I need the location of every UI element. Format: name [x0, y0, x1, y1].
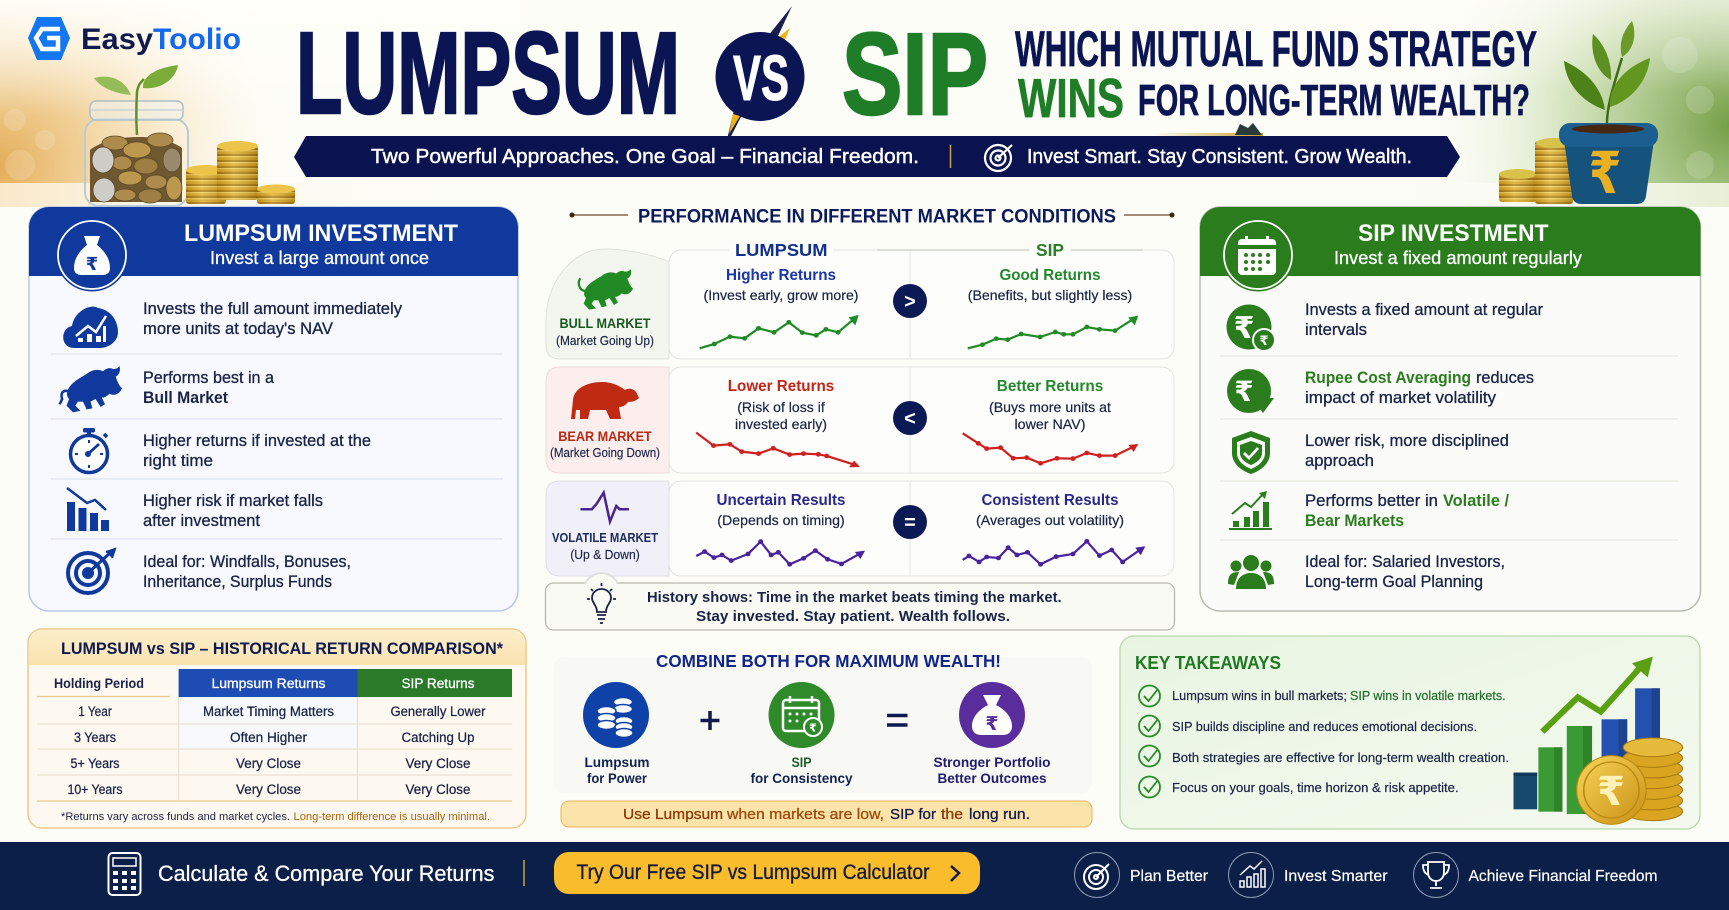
equals sign [887, 716, 908, 725]
table header cells: Lumpsum Returns [212, 676, 326, 691]
tagline right: Invest Smart. Stay Consistent. Grow Wealth. [1027, 146, 1412, 168]
callout: history shows [546, 573, 1174, 630]
table rows: Very Close [236, 756, 301, 771]
lumpsum bull result [704, 267, 858, 303]
table header cells [54, 669, 512, 697]
sip points text: impact of market volatility [1305, 389, 1497, 407]
takeaway text: Focus on your goals, time horizon & risk appetite. [1172, 780, 1459, 795]
icon: stopwatch [70, 428, 108, 472]
sip points text: Performs better in [1305, 492, 1438, 510]
icon: rupee coin [1226, 304, 1275, 351]
panel: combine both [554, 651, 1092, 793]
lumpsum points text: Performs best in a [143, 369, 275, 387]
comparison badge: greater than [893, 284, 927, 318]
logo [28, 17, 241, 60]
sip volatile result: (Averages out volatility) [976, 512, 1124, 528]
sip bear result: lower NAV) [1014, 416, 1086, 432]
bear market comparison card [669, 367, 1174, 473]
sip points text: Bear Markets [1305, 512, 1404, 530]
icon: rupee down arrow: ₹ [1234, 376, 1254, 407]
table rows [68, 704, 486, 797]
icon: rupee down arrow [1227, 369, 1274, 413]
headline question: WINS [1018, 67, 1124, 129]
big coin rupee: ₹ [1597, 770, 1625, 814]
sip points text: Invests a fixed amount at regular [1305, 301, 1543, 319]
takeaway text: SIP builds discipline and reduces emotional decisions. [1172, 719, 1477, 734]
icon: calculator [108, 853, 140, 895]
key takeaways title: KEY TAKEAWAYS [1135, 652, 1281, 673]
chart: lumpsum volatile line [696, 542, 865, 564]
callout: use lumpsum banner [561, 801, 1092, 827]
lumpsum bear result: (Risk of loss if [737, 399, 825, 415]
combine labels [584, 755, 1050, 786]
chart: sip volatile line [963, 541, 1145, 564]
coin stacks left [186, 141, 295, 204]
icon: money bag [56, 218, 128, 292]
history text: History shows: Time in the market beats timing the market. [647, 589, 1062, 606]
sip points text: Lower risk, more disciplined [1305, 432, 1509, 450]
combine title: COMBINE BOTH FOR MAXIMUM WEALTH! [656, 651, 1001, 671]
lumpsum bear result: Lower Returns [728, 378, 834, 395]
sip points text: reduces [1476, 369, 1534, 387]
combine labels: for Consistency [750, 771, 853, 786]
growth chart with coins [1513, 657, 1682, 824]
bull market tab: (Market Going Up) [556, 334, 654, 348]
volatile market comparison card [669, 481, 1174, 576]
lumpsum bear result: invested early) [735, 416, 827, 432]
tagline left: Two Powerful Approaches. One Goal – Financial Freedom. [371, 146, 919, 168]
icon: falling bars [67, 488, 109, 531]
combine labels: Better Outcomes [938, 771, 1046, 786]
logo wordmark: Easy [81, 23, 153, 56]
column label: sip [877, 240, 1143, 260]
column label: lumpsum: LUMPSUM [735, 240, 828, 260]
footer item: invest smarter: Invest Smarter [1284, 868, 1388, 885]
comparison badge: equal: = [904, 512, 916, 534]
sip bear result: (Buys more units at [989, 399, 1111, 415]
VS badge with lightning: VS [733, 42, 789, 114]
lumpsum bull result: Higher Returns [726, 267, 836, 284]
icon: rupee coin: ₹ [1259, 333, 1269, 348]
icon: calendar [1222, 218, 1294, 292]
sip points text: approach [1305, 452, 1374, 470]
lumpsum points text: Higher risk if market falls [143, 492, 323, 510]
sip bear result: Better Returns [997, 378, 1103, 395]
table header cells: Holding Period [54, 676, 144, 691]
lumpsum points text [143, 300, 403, 591]
table rows: 10+ Years [68, 782, 123, 797]
icon: portfolio bag: ₹ [985, 714, 999, 735]
table footnote: *Returns vary across funds and market cycles. [61, 811, 290, 823]
plus sign [700, 711, 720, 730]
panel header: Invest a fixed amount regularly [1334, 248, 1582, 268]
logo wordmark: Toolio [153, 23, 241, 56]
table rows: Very Close [236, 782, 301, 797]
footer bar [0, 842, 1729, 910]
logo icon [28, 17, 70, 60]
table title [29, 630, 525, 665]
button: calculator [554, 852, 980, 894]
lumpsum points text: Bull Market [143, 389, 228, 407]
title: SIP: SIP [842, 9, 988, 139]
bear market tab [546, 367, 669, 473]
table rows: Generally Lower [390, 704, 486, 719]
table rows: 3 Years [74, 730, 116, 745]
chart: sip bear line [963, 433, 1138, 463]
takeaway text: SIP wins in volatile markets. [1350, 688, 1506, 703]
volatile market tab: (Up & Down) [570, 548, 640, 562]
headline question [1015, 21, 1537, 129]
pot [1559, 123, 1658, 206]
comparison badge: greater than: > [904, 291, 916, 313]
sip points text: Ideal for: Salaried Investors, [1305, 553, 1505, 571]
chart: sip bull line [968, 316, 1138, 348]
sip volatile result: Consistent Results [982, 492, 1118, 509]
bear market tab: BEAR MARKET [558, 428, 652, 444]
comparison badge: less than: < [904, 408, 916, 430]
smudge above ribbon [1152, 123, 1263, 136]
sip points text: Rupee Cost Averaging [1305, 369, 1471, 387]
jar coins [90, 133, 182, 203]
callout: use lumpsum banner: Use Lumpsum [623, 807, 723, 823]
footer item: achieve financial freedom [1414, 852, 1658, 898]
row: bear market [546, 367, 1174, 473]
coins [1499, 138, 1573, 204]
takeaway text: Lumpsum wins in bull markets; [1172, 688, 1347, 703]
check icons [1139, 686, 1160, 798]
volatile market tab [546, 481, 669, 576]
icon: people [1228, 555, 1274, 589]
table rows: Market Timing Matters [203, 704, 334, 719]
footer item: achieve financial freedom: Achieve Financial Freedom [1468, 868, 1658, 885]
lumpsum points text: Higher returns if invested at the [143, 432, 371, 450]
takeaway text [1172, 688, 1509, 795]
history text [647, 589, 1062, 625]
lumpsum points text: right time [143, 452, 213, 470]
table body [37, 669, 512, 801]
lumpsum volatile result: Uncertain Results [716, 492, 846, 509]
lumpsum volatile result [716, 492, 846, 528]
panel header [29, 207, 518, 276]
callout: use lumpsum banner: SIP for [890, 807, 936, 823]
table rows: Very Close [406, 782, 470, 797]
combine labels: for Power [587, 771, 648, 786]
panel: key takeaways [1120, 636, 1700, 829]
panel header: SIP INVESTMENT [1358, 220, 1549, 247]
column label: sip: SIP [1036, 240, 1064, 260]
lumpsum points text: more units at today's NAV [143, 320, 333, 338]
plant [1564, 21, 1650, 128]
table rows: Catching Up [402, 730, 474, 745]
tagline ribbon [294, 136, 1460, 177]
footer item: invest smarter [1228, 852, 1388, 898]
callout: use lumpsum banner: when markets are low, [726, 807, 884, 823]
chart: lumpsum bull line [700, 315, 859, 348]
VS badge with lightning [716, 6, 804, 148]
chart: lumpsum bear line [696, 433, 860, 467]
button: calculator: Try Our Free SIP vs Lumpsum Calculator [576, 861, 930, 884]
footer item: plan better [1074, 852, 1209, 898]
callout: use lumpsum banner: the [941, 807, 963, 823]
footer call to action text: Calculate & Compare Your Returns [158, 861, 494, 886]
sip volatile result [976, 492, 1124, 528]
row: bull market [546, 249, 1174, 359]
panel header: LUMPSUM INVESTMENT [184, 220, 458, 247]
table title: LUMPSUM vs SIP – HISTORICAL RETURN COMPARISON* [61, 639, 503, 658]
panel: sip investment [1200, 207, 1700, 611]
icon: light bulb [585, 573, 618, 623]
callout: use lumpsum banner: long run. [969, 807, 1030, 823]
table rows: 5+ Years [70, 756, 120, 771]
heading: performance in market conditions: PERFORMANCE IN DIFFERENT MARKET CONDITIONS [638, 206, 1116, 228]
comparison badge: equal [893, 505, 927, 539]
table footnote [61, 811, 490, 823]
table header cells: SIP Returns [402, 676, 475, 691]
history text: Stay invested. Stay patient. Wealth follows. [696, 608, 1010, 625]
comparison badge: less than [893, 401, 927, 435]
jar glass [85, 101, 188, 206]
panel: lumpsum investment [29, 207, 518, 611]
title: LUMPSUM: LUMPSUM [296, 8, 680, 138]
volatile market tab: VOLATILE MARKET [552, 530, 658, 545]
panel header [1200, 207, 1700, 276]
seedling [94, 65, 178, 135]
table rows: Very Close [406, 756, 470, 771]
sip points text [1305, 301, 1543, 591]
icon: money bag: ₹ [86, 254, 98, 274]
logo wordmark [81, 23, 241, 56]
icon: target [985, 145, 1012, 171]
icon: cloud growth chart [63, 307, 118, 348]
bull market comparison card [669, 250, 1174, 359]
icon: lumpsum coins [583, 682, 649, 748]
jar with coins and seedling [85, 65, 188, 206]
sip points text: Long-term Goal Planning [1305, 573, 1483, 591]
sip points text: intervals [1305, 321, 1367, 339]
lumpsum bear result [728, 378, 834, 432]
table footnote: Long-term difference is usually minimal. [294, 811, 490, 823]
panel header: Invest a large amount once [210, 248, 429, 268]
icon: shield [1232, 431, 1270, 474]
takeaway text: Both strategies are effective for long-term wealth creation. [1172, 750, 1509, 765]
lumpsum points text: Inheritance, Surplus Funds [143, 573, 332, 591]
icon: bull [60, 366, 122, 412]
sip bull result [968, 267, 1132, 303]
icon: sip calendar: ₹ [809, 722, 817, 734]
sip bull result: (Benefits, but slightly less) [968, 287, 1132, 303]
combine labels: SIP [792, 755, 812, 770]
combine labels: Stronger Portfolio [934, 755, 1050, 770]
panel: historical return comparison table [28, 629, 526, 828]
sip bull result: Good Returns [1000, 267, 1100, 284]
icon: growth bars [1229, 491, 1272, 530]
lumpsum bull result: (Invest early, grow more) [704, 287, 858, 303]
headline question: FOR LONG-TERM WEALTH? [1138, 76, 1530, 125]
icon: rupee coin: ₹ [1234, 312, 1254, 345]
lumpsum volatile result: (Depends on timing) [717, 512, 845, 528]
icon: target [68, 549, 115, 593]
icon: portfolio bag [959, 682, 1025, 748]
footer item: plan better: Plan Better [1130, 868, 1209, 885]
sip points text: Volatile / [1443, 492, 1509, 510]
bull market tab [546, 249, 669, 359]
row: volatile market [546, 481, 1174, 576]
lumpsum points text: Ideal for: Windfalls, Bonuses, [143, 553, 351, 571]
lumpsum points text: after investment [143, 512, 260, 530]
plant pot and coins right [1499, 21, 1658, 206]
lumpsum points text: Invests the full amount immediately [143, 300, 403, 318]
combine labels: Lumpsum [584, 755, 650, 770]
icon: sip calendar [768, 682, 834, 748]
table rows: 1 Year [78, 704, 112, 719]
sip bear result [989, 378, 1111, 432]
bear market tab: (Market Going Down) [550, 446, 660, 460]
pot: ₹ [1588, 141, 1622, 206]
bull market tab: BULL MARKET [560, 316, 651, 331]
table rows: Often Higher [230, 730, 307, 745]
